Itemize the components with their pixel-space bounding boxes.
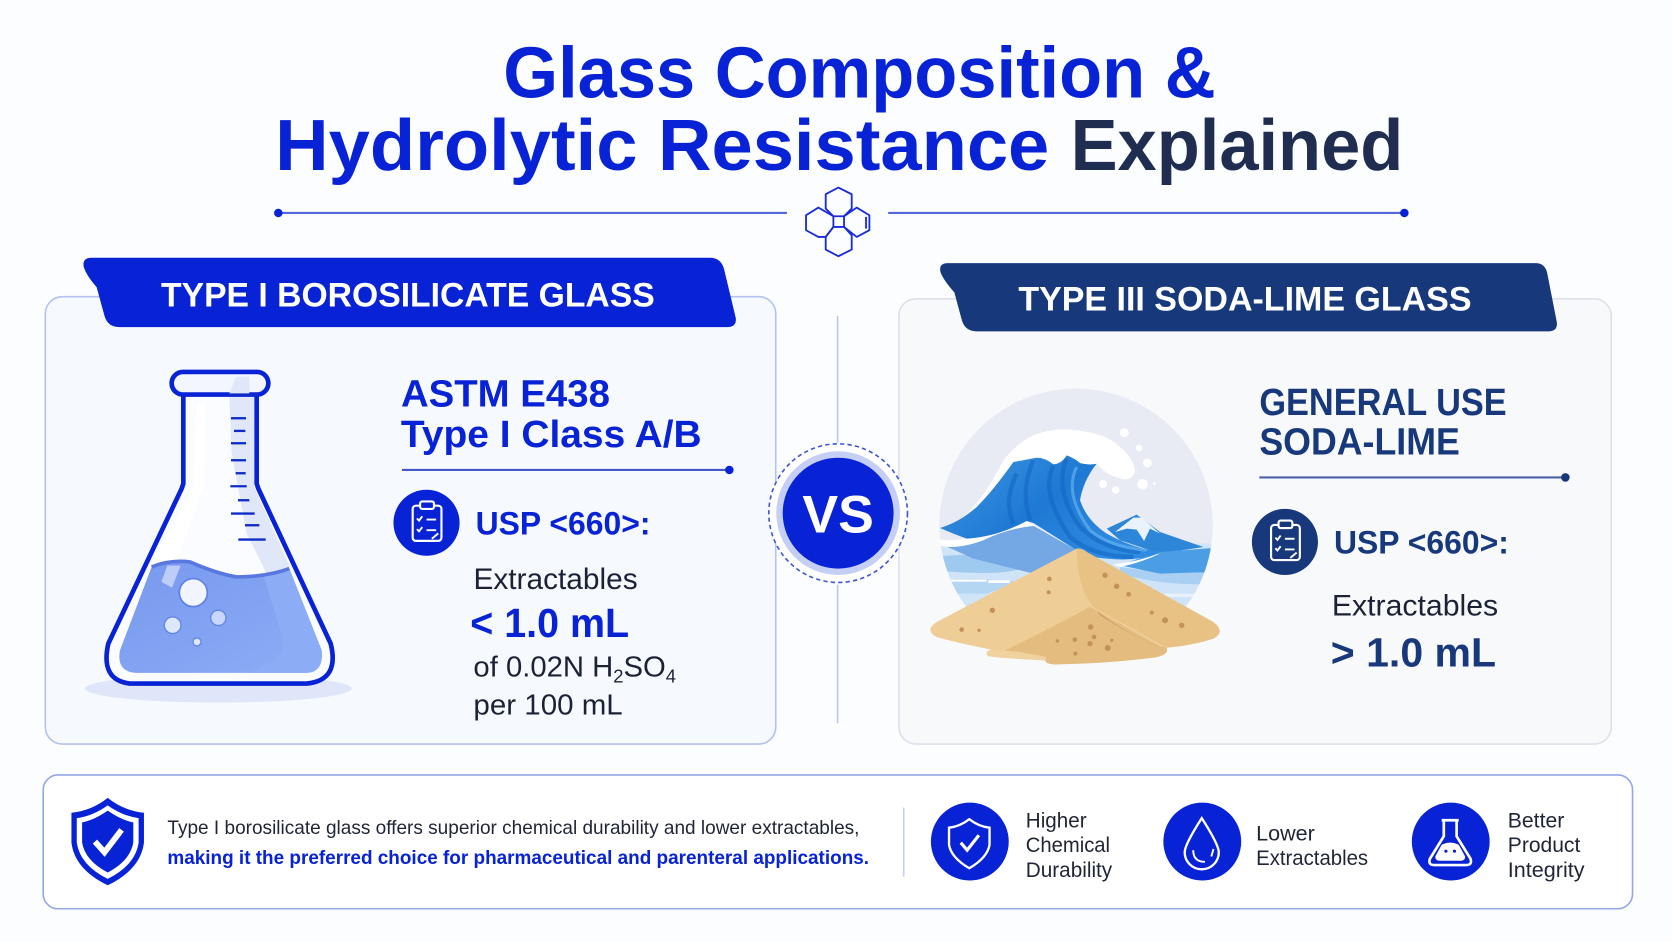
icon: shield with check bbox=[71, 798, 144, 885]
panel: Type III soda-lime glass bbox=[899, 263, 1611, 744]
benefit: better product integrity: Product bbox=[1508, 834, 1581, 857]
benefit: lower extractables bbox=[1163, 803, 1368, 881]
heading: ASTM E438 Type I Class A/B: ASTM E438 bbox=[401, 373, 610, 416]
text: USP 660 specification: USP <660>: bbox=[476, 505, 650, 541]
text: USP 660 specification: USP <660>: bbox=[1334, 525, 1509, 561]
text: USP 660 specification: of 0.02N H bbox=[473, 651, 611, 683]
benefit: better product integrity: Better bbox=[1508, 810, 1564, 833]
heading: ASTM E438 Type I Class A/B: Type I Class A/B bbox=[401, 413, 702, 456]
title: Hydrolytic Resistance bbox=[275, 105, 1049, 186]
benefit: better product integrity: Integrity bbox=[1508, 859, 1585, 882]
text: USP 660 specification bbox=[1331, 525, 1509, 676]
VS badge bbox=[769, 444, 907, 582]
icon: clipboard checklist bbox=[393, 490, 460, 556]
text: summary statement bbox=[167, 817, 869, 869]
title divider with molecule icon bbox=[274, 188, 1409, 256]
panel: Type I borosilicate glass bbox=[45, 258, 776, 744]
center divider line bbox=[837, 316, 839, 723]
icon: Erlenmeyer flask bbox=[85, 372, 352, 703]
benefit: higher chemical durability: Higher bbox=[1026, 810, 1087, 833]
benefit: higher chemical durability: Chemical bbox=[1026, 834, 1110, 857]
text: USP 660 specification: > 1.0 mL bbox=[1331, 630, 1496, 676]
text: summary statement: Type I borosilicate glass offers superior chemical durability and lower extractables, bbox=[167, 817, 859, 839]
illustration: wave and sand bbox=[930, 389, 1220, 664]
benefit: higher chemical durability: Durability bbox=[1026, 859, 1113, 882]
text: USP 660 specification: < 1.0 mL bbox=[470, 600, 629, 646]
text: USP 660 specification: per 100 mL bbox=[473, 690, 623, 722]
panel: summary and benefits bbox=[43, 775, 1633, 909]
title bbox=[275, 32, 1403, 186]
text: USP 660 specification: Extractables bbox=[473, 563, 638, 596]
heading: ASTM E438 Type I Class A/B bbox=[401, 373, 702, 456]
benefit: higher chemical durability bbox=[931, 803, 1113, 882]
text: USP 660 specification: 4 bbox=[666, 667, 676, 687]
text: USP 660 specification bbox=[470, 505, 676, 722]
benefit: lower extractables: Extractables bbox=[1256, 847, 1368, 870]
divider with end dot bbox=[402, 466, 734, 474]
heading: General use soda-lime: GENERAL USE bbox=[1259, 381, 1507, 424]
ribbon: Type III heading bbox=[940, 263, 1557, 331]
ribbon: Type I heading: TYPE I BOROSILICATE GLASS bbox=[161, 276, 655, 314]
heading: General use soda-lime: SODA-LIME bbox=[1259, 421, 1460, 464]
heading: General use soda-lime bbox=[1259, 381, 1507, 464]
text: USP 660 specification: Extractables bbox=[1332, 590, 1498, 623]
text: summary statement: making it the preferred choice for pharmaceutical and parenteral applications. bbox=[167, 847, 869, 869]
divider with end dot bbox=[1259, 473, 1570, 482]
icon: clipboard checklist bbox=[1252, 509, 1318, 575]
benefit: better product integrity bbox=[1412, 803, 1585, 882]
title: Glass Composition & bbox=[503, 32, 1216, 113]
VS badge: VS bbox=[802, 485, 874, 544]
ribbon: Type I heading bbox=[83, 258, 736, 327]
title: Explained bbox=[1071, 105, 1403, 186]
ribbon: Type III heading: TYPE III SODA-LIME GLASS bbox=[1018, 281, 1472, 319]
text: USP 660 specification: 2 bbox=[613, 667, 624, 687]
text: USP 660 specification: SO bbox=[624, 651, 666, 683]
benefit: lower extractables: Lower bbox=[1256, 823, 1315, 846]
